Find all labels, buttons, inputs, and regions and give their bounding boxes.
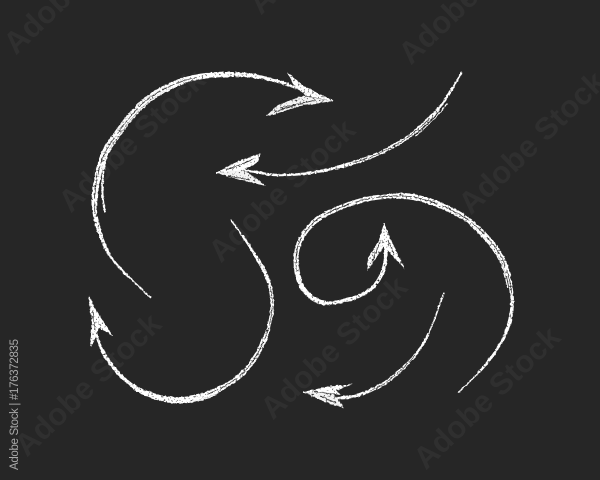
strand: inner tail (102, 157, 106, 212)
arrowhead (367, 223, 405, 271)
watermarks: Adobe Stock (406, 319, 568, 476)
arrowhead (89, 296, 113, 347)
watermarks: Adobe Stock (201, 112, 363, 269)
arrow 3: bottom-left arc (89, 220, 274, 403)
arrowhead (287, 72, 333, 101)
arrow 2: top-right sweep (216, 72, 465, 186)
watermarks: Adobe Stock (7, 306, 169, 463)
arrow 1: large top-left arc (92, 72, 335, 300)
stock id caption: Adobe Stock | #176372835 (9, 339, 21, 470)
arrowhead (303, 384, 353, 395)
arrow 4: large spiral (293, 194, 514, 394)
arrowhead (216, 153, 261, 173)
watermarks: Adobe Stock (253, 269, 415, 426)
watermarks: Adobe Stock (51, 62, 213, 219)
arrow 5: bottom-right sweep (303, 293, 444, 408)
